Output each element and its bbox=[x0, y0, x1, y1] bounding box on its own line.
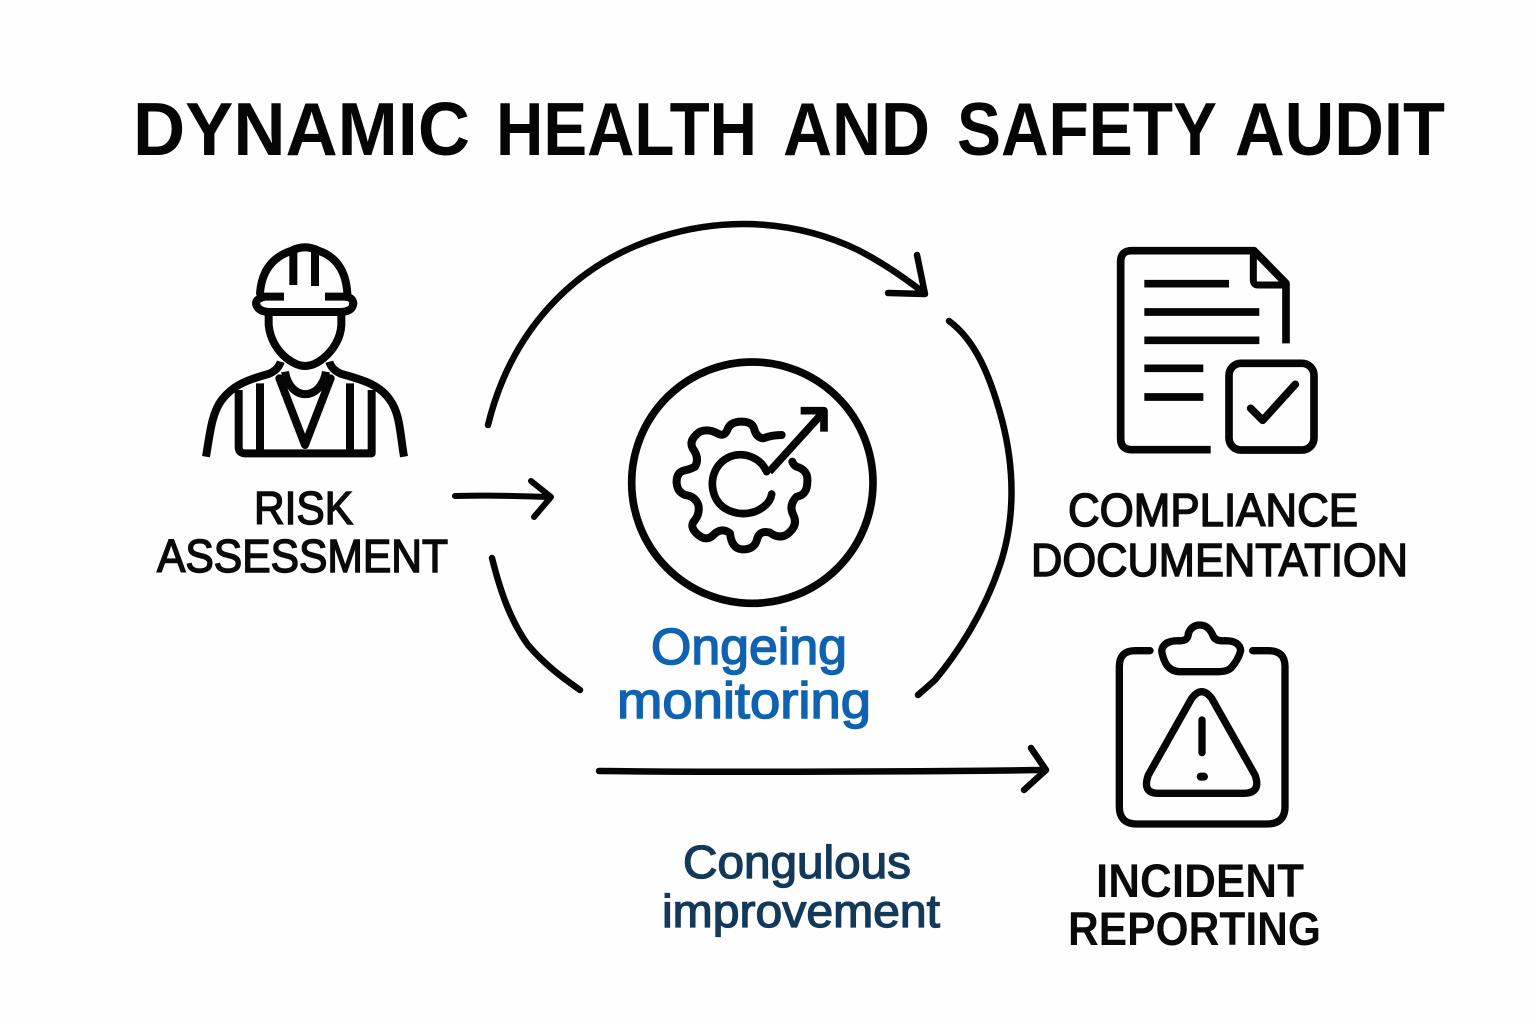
title: SAFETY bbox=[957, 87, 1217, 171]
title: DYNAMIC bbox=[133, 87, 470, 171]
arrow: monitoring to incident reporting bbox=[599, 748, 1046, 790]
icon: document with checkbox bbox=[1121, 251, 1314, 450]
label: risk assessment bbox=[157, 482, 448, 582]
label: compliance documentation bbox=[1031, 484, 1408, 586]
label: ongoing monitoring: monitoring bbox=[617, 672, 871, 729]
label: risk assessment: ASSESSMENT bbox=[157, 530, 448, 582]
icon: worker with hard hat and vest bbox=[206, 247, 404, 457]
label: incident reporting bbox=[1068, 854, 1321, 955]
label: continuous improvement: Congulous bbox=[683, 836, 911, 888]
arrow: top cycle arc bbox=[488, 224, 925, 425]
label: compliance documentation: COMPLIANCE bbox=[1068, 484, 1358, 536]
label: continuous improvement: improvement bbox=[662, 885, 940, 937]
title: HEALTH bbox=[496, 87, 757, 171]
arrow: right cycle arc bbox=[918, 321, 1012, 695]
title bbox=[133, 87, 1445, 171]
label: incident reporting: REPORTING bbox=[1068, 902, 1321, 955]
arrow: risk assessment to monitoring bbox=[455, 481, 551, 517]
label: risk assessment: RISK bbox=[254, 482, 353, 534]
label: compliance documentation: DOCUMENTATION bbox=[1031, 534, 1408, 586]
icon: gear with growth arrow in circle bbox=[632, 362, 873, 603]
label: ongoing monitoring bbox=[617, 618, 871, 729]
label: continuous improvement bbox=[662, 836, 940, 937]
icon: clipboard with warning triangle bbox=[1119, 625, 1285, 824]
title: AUDIT bbox=[1235, 87, 1445, 171]
label: incident reporting: INCIDENT bbox=[1096, 854, 1304, 907]
arrow: lower left cycle arc bbox=[492, 558, 580, 690]
title: AND bbox=[783, 87, 930, 171]
label: ongoing monitoring: Ongeing bbox=[651, 618, 847, 675]
